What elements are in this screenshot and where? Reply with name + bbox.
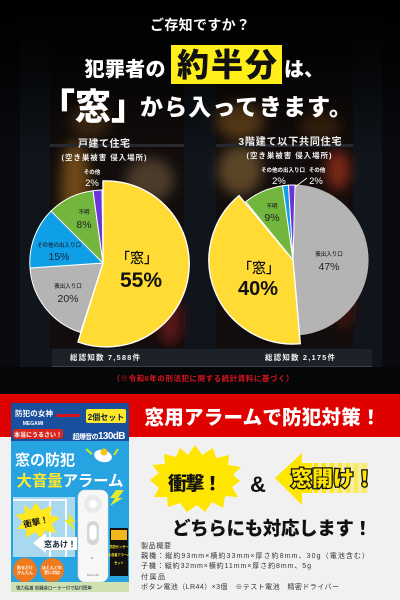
feature circles: 貼るだけ [17,564,33,570]
label: other with leader line: 2% [309,176,323,187]
package footer strip [11,582,129,592]
source note: （※令和6年の刑法犯に関する統計資料に基づく） [112,373,294,383]
label: window: 「窓」 [238,260,280,276]
total count: 総認知数 7,588件 [70,352,140,362]
package footer strip: 強力粘着 低騒音ローラー付で貼付簡単 [16,584,93,592]
package header: MEGAMI [23,421,44,427]
pie slices [209,185,368,344]
accessories list: ボタン電池（LR44）×3個 ※テスト電池 精密ドライバー [141,582,339,591]
label: other with leader line [295,166,326,187]
warning label [108,528,131,576]
window-open arrow [33,533,77,553]
bottom light panel [0,437,400,600]
red banner [0,394,400,437]
product specifications [141,541,369,591]
title block [39,17,352,127]
package header: 超爆音の130dB [72,431,126,442]
package title [15,451,124,490]
label: unknown [264,203,280,224]
package header [11,403,129,442]
label: other: 2% [85,178,99,189]
package title: 窓の防犯 [15,451,75,469]
lead-in question: ご存知ですか？ [150,17,250,33]
lightning icons [64,490,124,531]
headline part: criminals: 犯罪者の [84,57,166,81]
label: window: 40% [238,278,278,300]
package title: 大音量アラーム [16,472,124,490]
label: unknown: 不明 [266,203,278,210]
label: unknown [76,209,92,231]
label: other entrances: その他の出入り口 [37,241,81,249]
feature circles [13,558,64,582]
sub unit dimensions: 子機：縦約32mm×横約11mm×厚さ約8mm、5g [141,561,311,570]
warning label: 防犯センサー [109,544,129,549]
label: front door: 20% [57,293,79,305]
product package [11,403,131,592]
ampersand: & [250,472,266,497]
label: unknown: 不明 [78,209,90,216]
label: unknown: 8% [76,219,92,231]
chart heading: (空き巣被害 侵入場所) [62,152,147,162]
label: other entrances [37,241,81,263]
alarm device: MEGAMI [87,573,99,577]
chart heading: 戸建て住宅 [78,137,130,150]
window-open arrow badge: 窓開け！ [291,468,375,491]
impact starburst [16,502,60,538]
spec heading: 製品概要 [141,541,171,550]
feature circles: ほとんどの [42,564,62,570]
feature circles: 窓に対応 [44,569,60,575]
package body [11,403,129,592]
warning label: 大音量アラーム [108,552,131,557]
label: other entrances [261,166,305,187]
impact starburst badge: 衝撃！ [168,472,222,495]
feature circles: かんたん [17,569,33,575]
highlight box: about half: 約半分 [177,47,277,83]
label: front door: 表出入り口 [54,282,82,290]
label: other entrances: その他の出入り口 [261,166,305,174]
label: other with leader line: その他 [309,166,326,174]
red banner: 窓用アラームで防犯対策！ [144,406,380,429]
label: front door [315,250,343,273]
label: other: その他 [84,168,101,176]
label: window: 55% [120,269,162,292]
alarm device [78,490,108,582]
warning label: セット [114,560,124,565]
panel: low-rise apartment pie chart [209,135,368,362]
label: other entrances: 15% [48,251,70,263]
package header: 2個セット [88,412,124,422]
chart heading: (空き巣被害 侵入場所) [246,150,332,160]
pie slices [30,181,189,347]
label: unknown: 9% [264,212,280,224]
label: front door [54,282,82,305]
panel: detached house pie chart [30,137,189,362]
headline: window: 「窓」 [39,86,147,127]
label: other [84,168,101,189]
headline: enter through: から入ってきます。 [140,94,352,120]
impact starburst badge [150,445,241,512]
headline particle: は、 [284,59,324,81]
main unit dimensions: 親機：縦約93mm×横約33mm×厚さ約8mm、30g（電池含む） [141,551,369,560]
label: front door: 表出入り口 [315,250,343,258]
window-open arrow badge [275,453,375,505]
package header: 防犯の女神 [15,408,54,418]
window-open arrow: 窓あけ！ [44,539,76,549]
egg mascot icon [86,448,118,464]
total count: 総認知数 2,175件 [265,352,336,362]
chart heading: 3階建て以下共同住宅 [238,135,342,148]
closing statement: どちらにも対応します！ [172,518,372,539]
impact starburst: 衝撃！ [22,514,50,530]
package header: 本当にうるさい！ [14,431,62,439]
accessories heading: 付属品 [141,572,165,581]
window illustration [13,497,75,557]
label: front door: 47% [318,261,340,273]
chart heading [62,137,147,162]
label: other entrances: 2% [272,176,286,187]
label: window [116,250,162,292]
label: window: 「窓」 [116,250,158,266]
chart heading [238,135,342,160]
label: window [238,260,280,300]
dark window background [0,0,400,394]
